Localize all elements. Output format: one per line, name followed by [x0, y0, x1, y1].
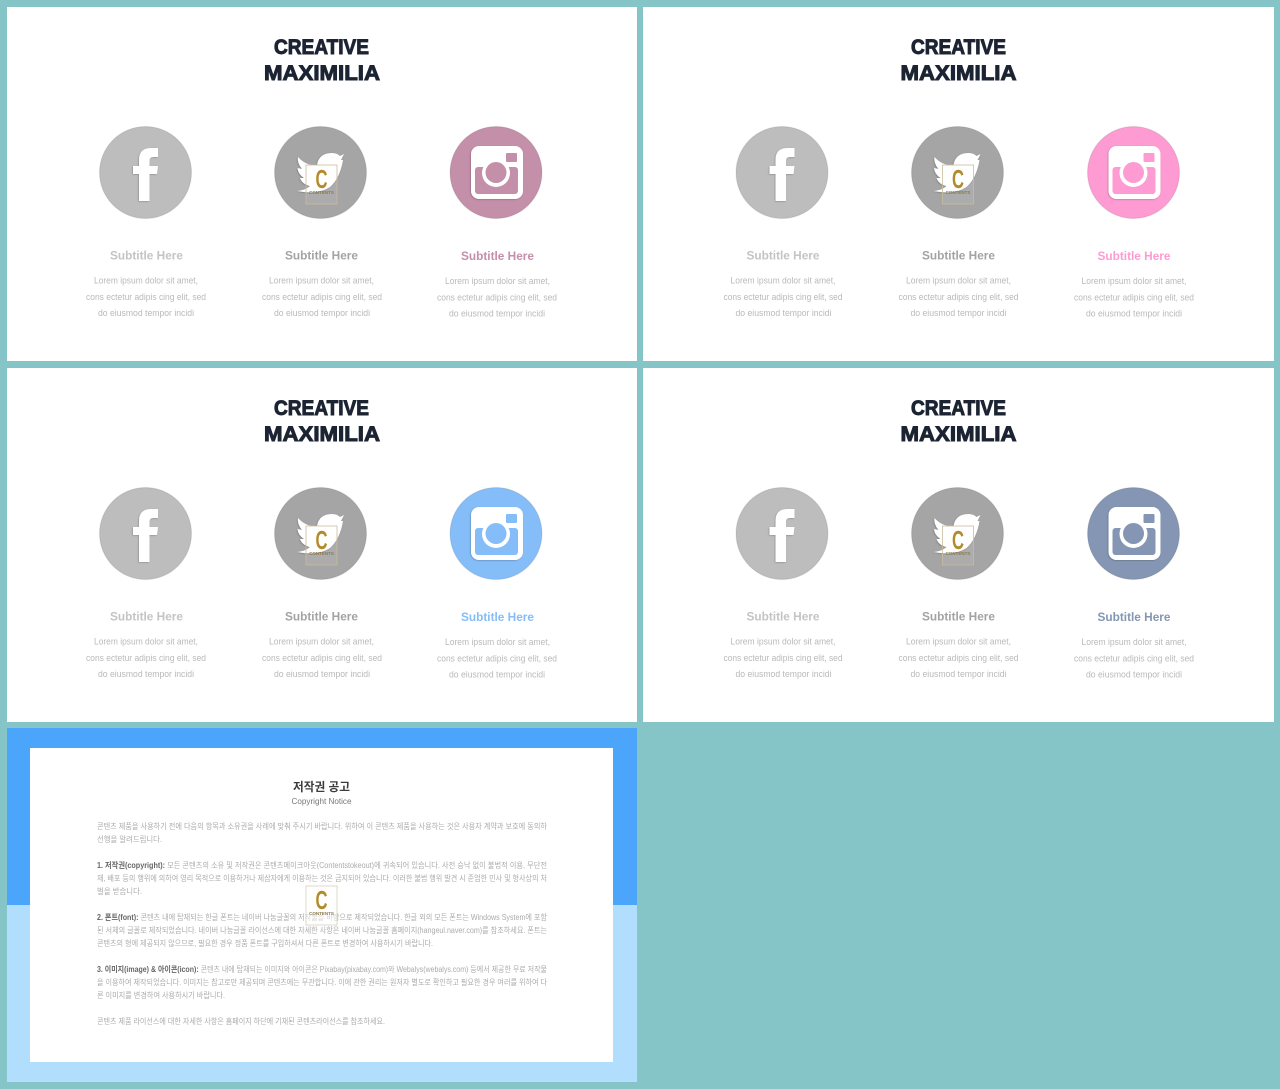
column text: instagram: Subtitle Here	[1098, 610, 1171, 624]
text block: font: 된 서체의 글꼴로 제작되었습니다. 네이버 나눔글꼴 라이선스에 대한 자세한 사항은 네이버 나눔글꼴 홈페이지(hangeul.naver.com)를 참조하세요. 폰트는	[97, 925, 547, 935]
column text: facebook: Lorem ipsum dolor sit amet,	[730, 636, 836, 648]
column text: instagram: Subtitle Here	[461, 610, 534, 624]
column text: instagram: do eiusmod tempor incidi	[1086, 308, 1182, 320]
panel: slate accent slide	[643, 368, 1274, 722]
column text: twitter: Subtitle Here	[285, 610, 358, 624]
text block: introduction: 콘텐츠 제품을 사용하기 전에 다음의 항목과 소유권을 사례에 맞춰 주시기 바랍니다. 위하여 이 콘텐츠 제품을 사용하는 것은 사용자 계약과 보호에 동의하	[97, 821, 548, 831]
column text: facebook: do eiusmod tempor incidi	[736, 308, 832, 319]
column text: twitter: Subtitle Here	[922, 610, 995, 624]
icon: instagram	[450, 126, 542, 218]
column text: facebook: do eiusmod tempor incidi	[736, 669, 832, 680]
icon: instagram	[450, 488, 542, 580]
column text: facebook: Subtitle Here	[110, 248, 183, 262]
text block: font: 2. 폰트(font): 콘텐츠 내에 탑재되는 한글 폰트는 네이버 나눔글꼴의 저작물을 바탕으로 제작되었습니다. 한글 외의 모든 폰트는 Windows System에 포함	[97, 912, 548, 922]
column text: twitter: cons ectetur adipis cing elit, sed	[262, 292, 382, 303]
text block: image and icon: 을 이용하여 제작되었습니다. 이미지는 참고로만 제공되며 콘텐츠에는 무관합니다. 이에 관한 권리는 원저자 별도로 확인하고 필요한 경우 여러를 위하여 다	[97, 977, 548, 987]
text block: introduction	[97, 821, 548, 844]
icon: instagram	[1088, 488, 1180, 580]
column text: twitter: cons ectetur adipis cing elit, sed	[898, 292, 1018, 303]
heading: copyright notice	[292, 779, 352, 806]
title	[900, 35, 1016, 85]
icon: instagram	[1088, 126, 1180, 218]
icon: facebook	[736, 126, 828, 218]
column text: twitter: do eiusmod tempor incidi	[274, 669, 370, 680]
title: CREATIVE	[274, 35, 369, 59]
title: MAXIMILIA	[900, 422, 1016, 446]
text block: copyright: 벌을 받습니다.	[97, 886, 142, 896]
column text: instagram: do eiusmod tempor incidi	[449, 308, 545, 320]
icon: watermark logo	[306, 885, 337, 925]
column text: instagram: Subtitle Here	[461, 249, 534, 263]
icon: twitter	[912, 488, 1004, 580]
icon: watermark logo: C	[316, 525, 328, 555]
column text: instagram: Lorem ipsum dolor sit amet,	[1082, 276, 1186, 287]
text block: copyright	[97, 860, 547, 896]
icon: watermark logo: C	[952, 525, 964, 555]
column text: facebook	[724, 610, 842, 680]
icon: watermark logo: C	[952, 164, 964, 194]
column text: instagram	[1074, 610, 1194, 680]
column text: facebook	[724, 248, 842, 319]
column text: instagram: cons ectetur adipis cing elit, sed	[1074, 654, 1194, 664]
icon: watermark logo	[306, 164, 337, 204]
title	[264, 396, 380, 446]
column text: twitter: Subtitle Here	[922, 248, 995, 262]
column text: instagram: do eiusmod tempor incidi	[449, 670, 545, 680]
column text: twitter	[898, 610, 1018, 680]
column text: twitter: Lorem ipsum dolor sit amet,	[906, 636, 1011, 648]
icon: watermark logo: C	[316, 164, 328, 194]
heading: copyright notice: 저작권 공고	[293, 779, 350, 794]
column text: twitter: cons ectetur adipis cing elit, sed	[898, 653, 1018, 664]
icon: twitter	[274, 488, 366, 580]
column text: facebook: do eiusmod tempor incidi	[98, 308, 194, 319]
column text: facebook: cons ectetur adipis cing elit, sed	[86, 292, 206, 303]
column text: instagram	[1074, 249, 1194, 320]
title: CREATIVE	[911, 396, 1006, 420]
title: CREATIVE	[911, 35, 1006, 59]
column text: twitter: Lorem ipsum dolor sit amet,	[269, 636, 374, 648]
icon: watermark logo: CONTENTS	[309, 911, 334, 916]
column text: instagram: Subtitle Here	[1098, 249, 1171, 263]
column text: facebook: do eiusmod tempor incidi	[98, 669, 194, 680]
title	[264, 35, 380, 85]
column text: twitter: cons ectetur adipis cing elit, sed	[262, 653, 382, 664]
column text: instagram: do eiusmod tempor incidi	[1086, 670, 1182, 680]
icon: watermark logo	[306, 525, 337, 565]
column text: twitter: Subtitle Here	[285, 248, 358, 262]
column text: twitter: do eiusmod tempor incidi	[910, 669, 1006, 680]
column text: instagram: Lorem ipsum dolor sit amet,	[1082, 637, 1186, 648]
text block: copyright: 재, 배포 등의 행위에 의하여 영리 목적으로 이용하거나 제삼자에게 이용하는 것은 금지되어 있습니다. 이러한 불법 행위 발견 시 준엄한 민사 및 형사상의 처	[97, 873, 547, 883]
icon: watermark logo: C	[316, 885, 328, 915]
title	[900, 396, 1016, 446]
column text: facebook: Lorem ipsum dolor sit amet,	[94, 276, 198, 286]
column text: facebook: cons ectetur adipis cing elit, sed	[86, 653, 206, 664]
column text: instagram: cons ectetur adipis cing elit, sed	[1074, 292, 1194, 304]
column text: twitter: Lorem ipsum dolor sit amet,	[906, 276, 1011, 286]
column text: facebook: Lorem ipsum dolor sit amet,	[94, 636, 198, 648]
column text: facebook: Lorem ipsum dolor sit amet,	[730, 276, 836, 286]
column text: twitter	[262, 610, 382, 680]
icon: watermark logo: CONTENTS	[946, 190, 970, 195]
column text: instagram: cons ectetur adipis cing elit, sed	[437, 654, 557, 664]
column text: twitter: do eiusmod tempor incidi	[910, 308, 1006, 319]
column text: instagram: cons ectetur adipis cing elit, sed	[437, 292, 557, 304]
text block: font	[97, 912, 548, 948]
icon: twitter	[912, 126, 1004, 218]
icon: watermark logo	[942, 164, 974, 204]
column text: instagram	[437, 249, 557, 320]
column text: facebook: cons ectetur adipis cing elit, sed	[724, 653, 842, 664]
column text: instagram: Lorem ipsum dolor sit amet,	[445, 637, 550, 648]
column text: instagram	[437, 610, 557, 680]
text block: font: 콘텐츠의 형에 제공되지 않으므로, 필요한 경우 정품 폰트를 구입하셔서 다른 폰트로 변경하여 사용하시기 바랍니다.	[97, 938, 433, 948]
icon: twitter	[274, 126, 366, 218]
panel: copyright notice	[7, 728, 637, 1082]
title: MAXIMILIA	[264, 422, 380, 446]
column text: facebook	[86, 248, 206, 319]
icon: watermark logo: CONTENTS	[946, 551, 970, 556]
icon: watermark logo: CONTENTS	[309, 190, 334, 195]
column text: twitter	[898, 248, 1018, 319]
panel: blue accent slide	[7, 368, 637, 722]
icon: watermark logo: CONTENTS	[309, 551, 334, 556]
column text: twitter: Lorem ipsum dolor sit amet,	[269, 276, 374, 286]
column text: facebook: Subtitle Here	[746, 248, 820, 262]
text block: image and icon: 른 이미지를 변경하여 사용하시기 바랍니다.	[97, 990, 225, 1000]
text block: image and icon	[97, 964, 548, 1000]
title: CREATIVE	[274, 396, 369, 420]
title: MAXIMILIA	[264, 61, 380, 85]
icon: facebook	[100, 488, 192, 580]
column text: twitter	[262, 248, 382, 319]
heading: copyright notice: Copyright Notice	[292, 796, 352, 806]
icon: facebook	[736, 488, 828, 580]
text block: introduction: 선행을 알려드립니다.	[97, 834, 162, 844]
panel: pink accent slide	[7, 7, 637, 361]
text block: license note: 콘텐츠 제품 라이선스에 대한 자세한 사항은 홈페이지 하단에 기재된 콘텐츠라이선스를 참조하세요.	[97, 1016, 385, 1026]
column text: facebook: Subtitle Here	[110, 610, 183, 624]
column text: facebook: cons ectetur adipis cing elit, sed	[724, 292, 842, 303]
column text: instagram: Lorem ipsum dolor sit amet,	[445, 276, 550, 287]
icon: facebook	[100, 126, 192, 218]
title: MAXIMILIA	[900, 61, 1016, 85]
column text: twitter: do eiusmod tempor incidi	[274, 308, 370, 319]
icon: watermark logo	[942, 525, 974, 565]
panel: bright pink accent slide	[643, 7, 1274, 361]
text block: copyright: 1. 저작권(copyright): 모든 콘텐츠의 소유 및 저작권은 콘텐츠메이크아웃(Contentstokeout)에 귀속되어 있습니다. 사전 승낙 없이 불법적 이용, 무단전	[97, 860, 547, 870]
column text: facebook: Subtitle Here	[746, 610, 820, 624]
column text: facebook	[86, 610, 206, 680]
text block: image and icon: 3. 이미지(image) & 아이콘(icon): 콘텐츠 내에 탑재되는 이미지와 아이콘은 Pixabay(pixabay.com)와 Webalys(webalys.com) 등에서 제공한 무료 저작물	[97, 964, 547, 974]
